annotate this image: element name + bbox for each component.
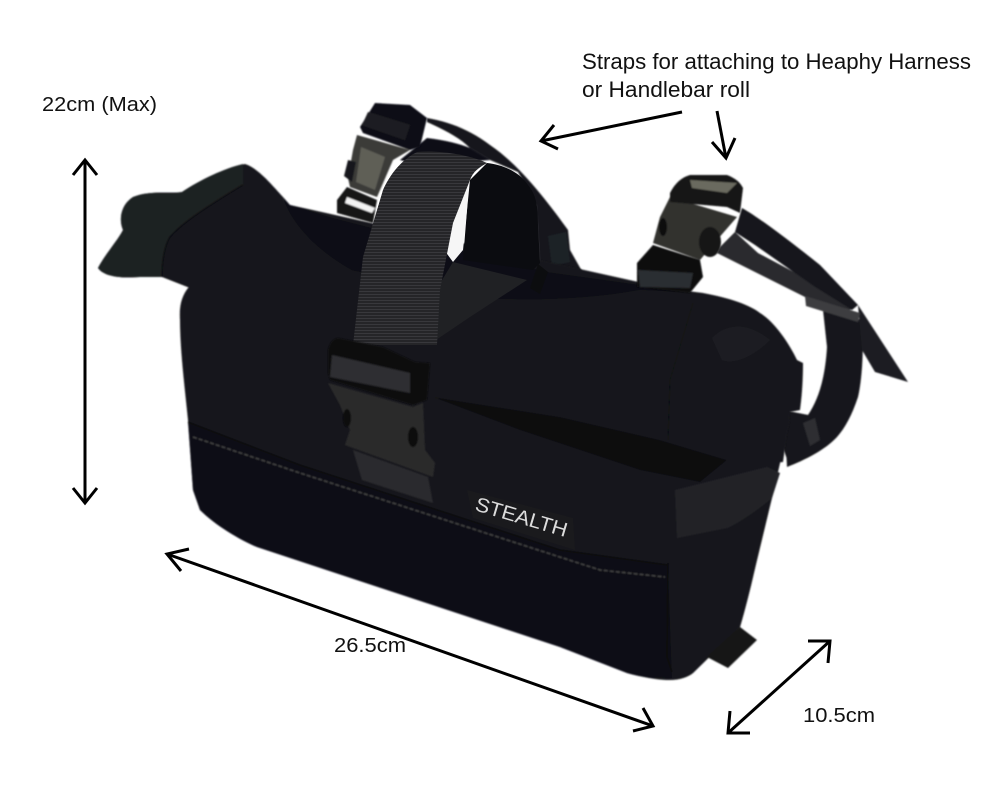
shadow under roll	[433, 397, 727, 482]
arrow: width	[167, 549, 653, 731]
lower strap	[717, 232, 856, 310]
arrow: to right strap	[712, 111, 735, 158]
flap fold seam	[162, 185, 243, 277]
panel corner	[667, 563, 672, 672]
side panel	[672, 490, 772, 679]
gap	[442, 180, 469, 262]
panel stitch line	[193, 437, 665, 577]
brand label: STEALTH: STEALTH	[473, 494, 570, 542]
front closure strap	[353, 152, 548, 345]
tab at bottom right	[707, 627, 757, 668]
end-of-roll highlight	[712, 327, 770, 361]
front band	[353, 152, 487, 345]
left top buckle	[337, 103, 427, 223]
under web	[433, 262, 527, 342]
side strap	[675, 467, 780, 538]
upper strap	[735, 208, 858, 310]
end-of-roll fold	[668, 303, 693, 440]
loop inside	[463, 163, 540, 270]
bottom panel	[188, 422, 672, 678]
heading: straps note: Straps for attaching to Heaphy Harness	[582, 49, 971, 74]
lower body	[180, 205, 790, 680]
slider	[805, 296, 860, 322]
arrow: to left strap	[541, 112, 682, 149]
panel ridge	[188, 422, 668, 565]
flap end	[98, 164, 243, 277]
front buckle	[328, 338, 435, 503]
loop strap	[784, 310, 863, 467]
keeper	[530, 264, 548, 294]
heading: straps note	[582, 49, 971, 102]
right side straps	[717, 208, 908, 467]
bag body	[98, 164, 803, 680]
rolled top closure	[98, 164, 803, 463]
tail	[858, 305, 908, 382]
rear strap behind the bag	[400, 118, 587, 280]
label: width: 26.5cm	[334, 635, 406, 657]
rear top edge	[283, 197, 703, 340]
label: depth: 10.5cm	[803, 705, 875, 727]
arrow: height	[73, 160, 97, 503]
right top buckle	[637, 175, 743, 293]
brand label: STEALTH	[467, 490, 575, 550]
arrow: depth	[728, 641, 830, 733]
label: height: 22cm (Max)	[42, 94, 157, 116]
strap ring	[782, 412, 822, 462]
heading: straps note: or Handlebar roll	[582, 77, 750, 102]
